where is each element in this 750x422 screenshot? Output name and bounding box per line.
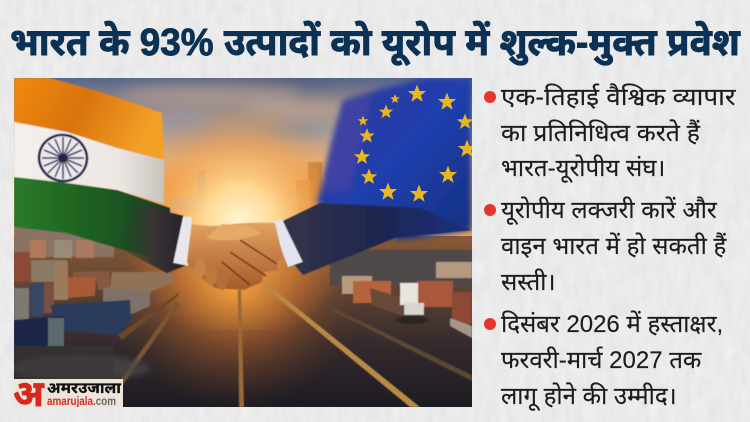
bullet 1: का प्रतिनिधित्व करते हैं <box>501 120 700 147</box>
title: भारत के 93% उत्पादों को यूरोप में शुल्क-मुक्त प्रवेश <box>10 22 740 64</box>
bullet 1: एक-तिहाई वैश्विक व्यापार <box>501 84 736 111</box>
ashoka chakra <box>34 130 92 186</box>
bullet 1: भारत-यूरोपीय संघ। <box>501 155 665 182</box>
road lines <box>116 283 472 407</box>
bullet 3 <box>484 310 723 411</box>
EU stars <box>354 84 476 202</box>
bullet 2: वाइन भारत में हो सकती हैं <box>501 233 726 260</box>
right suit sleeve <box>283 203 472 275</box>
shirt cuffs <box>173 216 303 267</box>
sun glow <box>100 110 390 330</box>
container yard and truck right <box>330 250 472 338</box>
logo: Amar Ujala <box>13 373 123 414</box>
bullet 3: फरवरी-मार्च 2027 तक <box>501 347 701 374</box>
EU flag <box>317 78 472 240</box>
sky and clouds <box>14 74 472 258</box>
bullet 3: लागू होने की उम्मीद। <box>501 383 677 410</box>
bullet 2: यूरोपीय लक्जरी कारें और <box>501 197 717 224</box>
bullet 2: सस्ती। <box>501 269 556 296</box>
bullet 1 <box>484 83 736 183</box>
bullet 3: दिसंबर 2026 में हस्ताक्षर, <box>501 311 723 338</box>
illustration: handshake between India and EU flags <box>14 78 472 407</box>
bullet 2 <box>484 196 727 296</box>
left suit sleeve <box>115 205 187 273</box>
India flag <box>14 78 170 262</box>
logo: Amar Ujala: अमरउजाला <box>47 380 121 397</box>
container yard left <box>10 227 180 381</box>
ground <box>14 236 472 407</box>
clasped hands <box>187 223 283 290</box>
distant skyline <box>170 162 322 218</box>
bullet list <box>484 83 736 411</box>
